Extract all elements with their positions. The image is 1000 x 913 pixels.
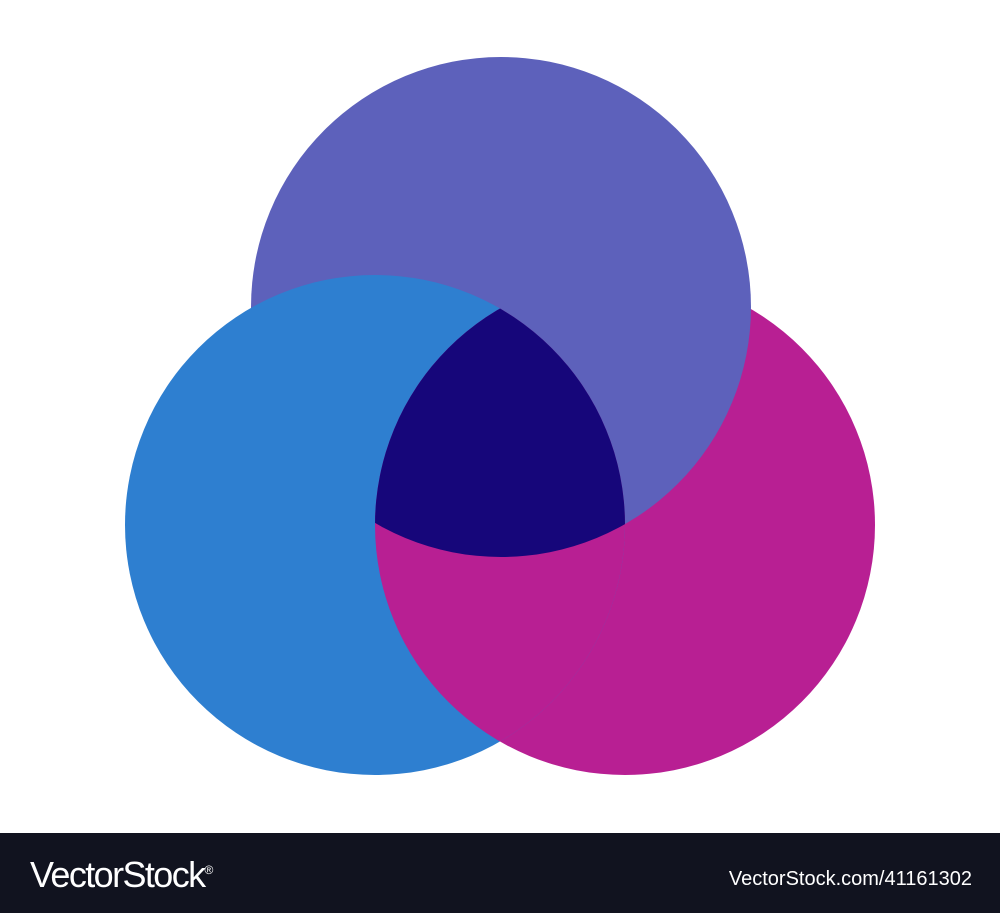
circle: purple <box>251 57 751 557</box>
logo text: VectorStock® <box>30 854 213 895</box>
center intersection <box>375 308 625 557</box>
circle: magenta <box>375 275 875 775</box>
overlap: magenta over blue <box>375 308 625 742</box>
venn diagram <box>125 57 875 775</box>
url text: VectorStock.com/41161302 <box>729 868 972 890</box>
circle: blue <box>125 275 625 775</box>
footer bar <box>0 833 1000 913</box>
